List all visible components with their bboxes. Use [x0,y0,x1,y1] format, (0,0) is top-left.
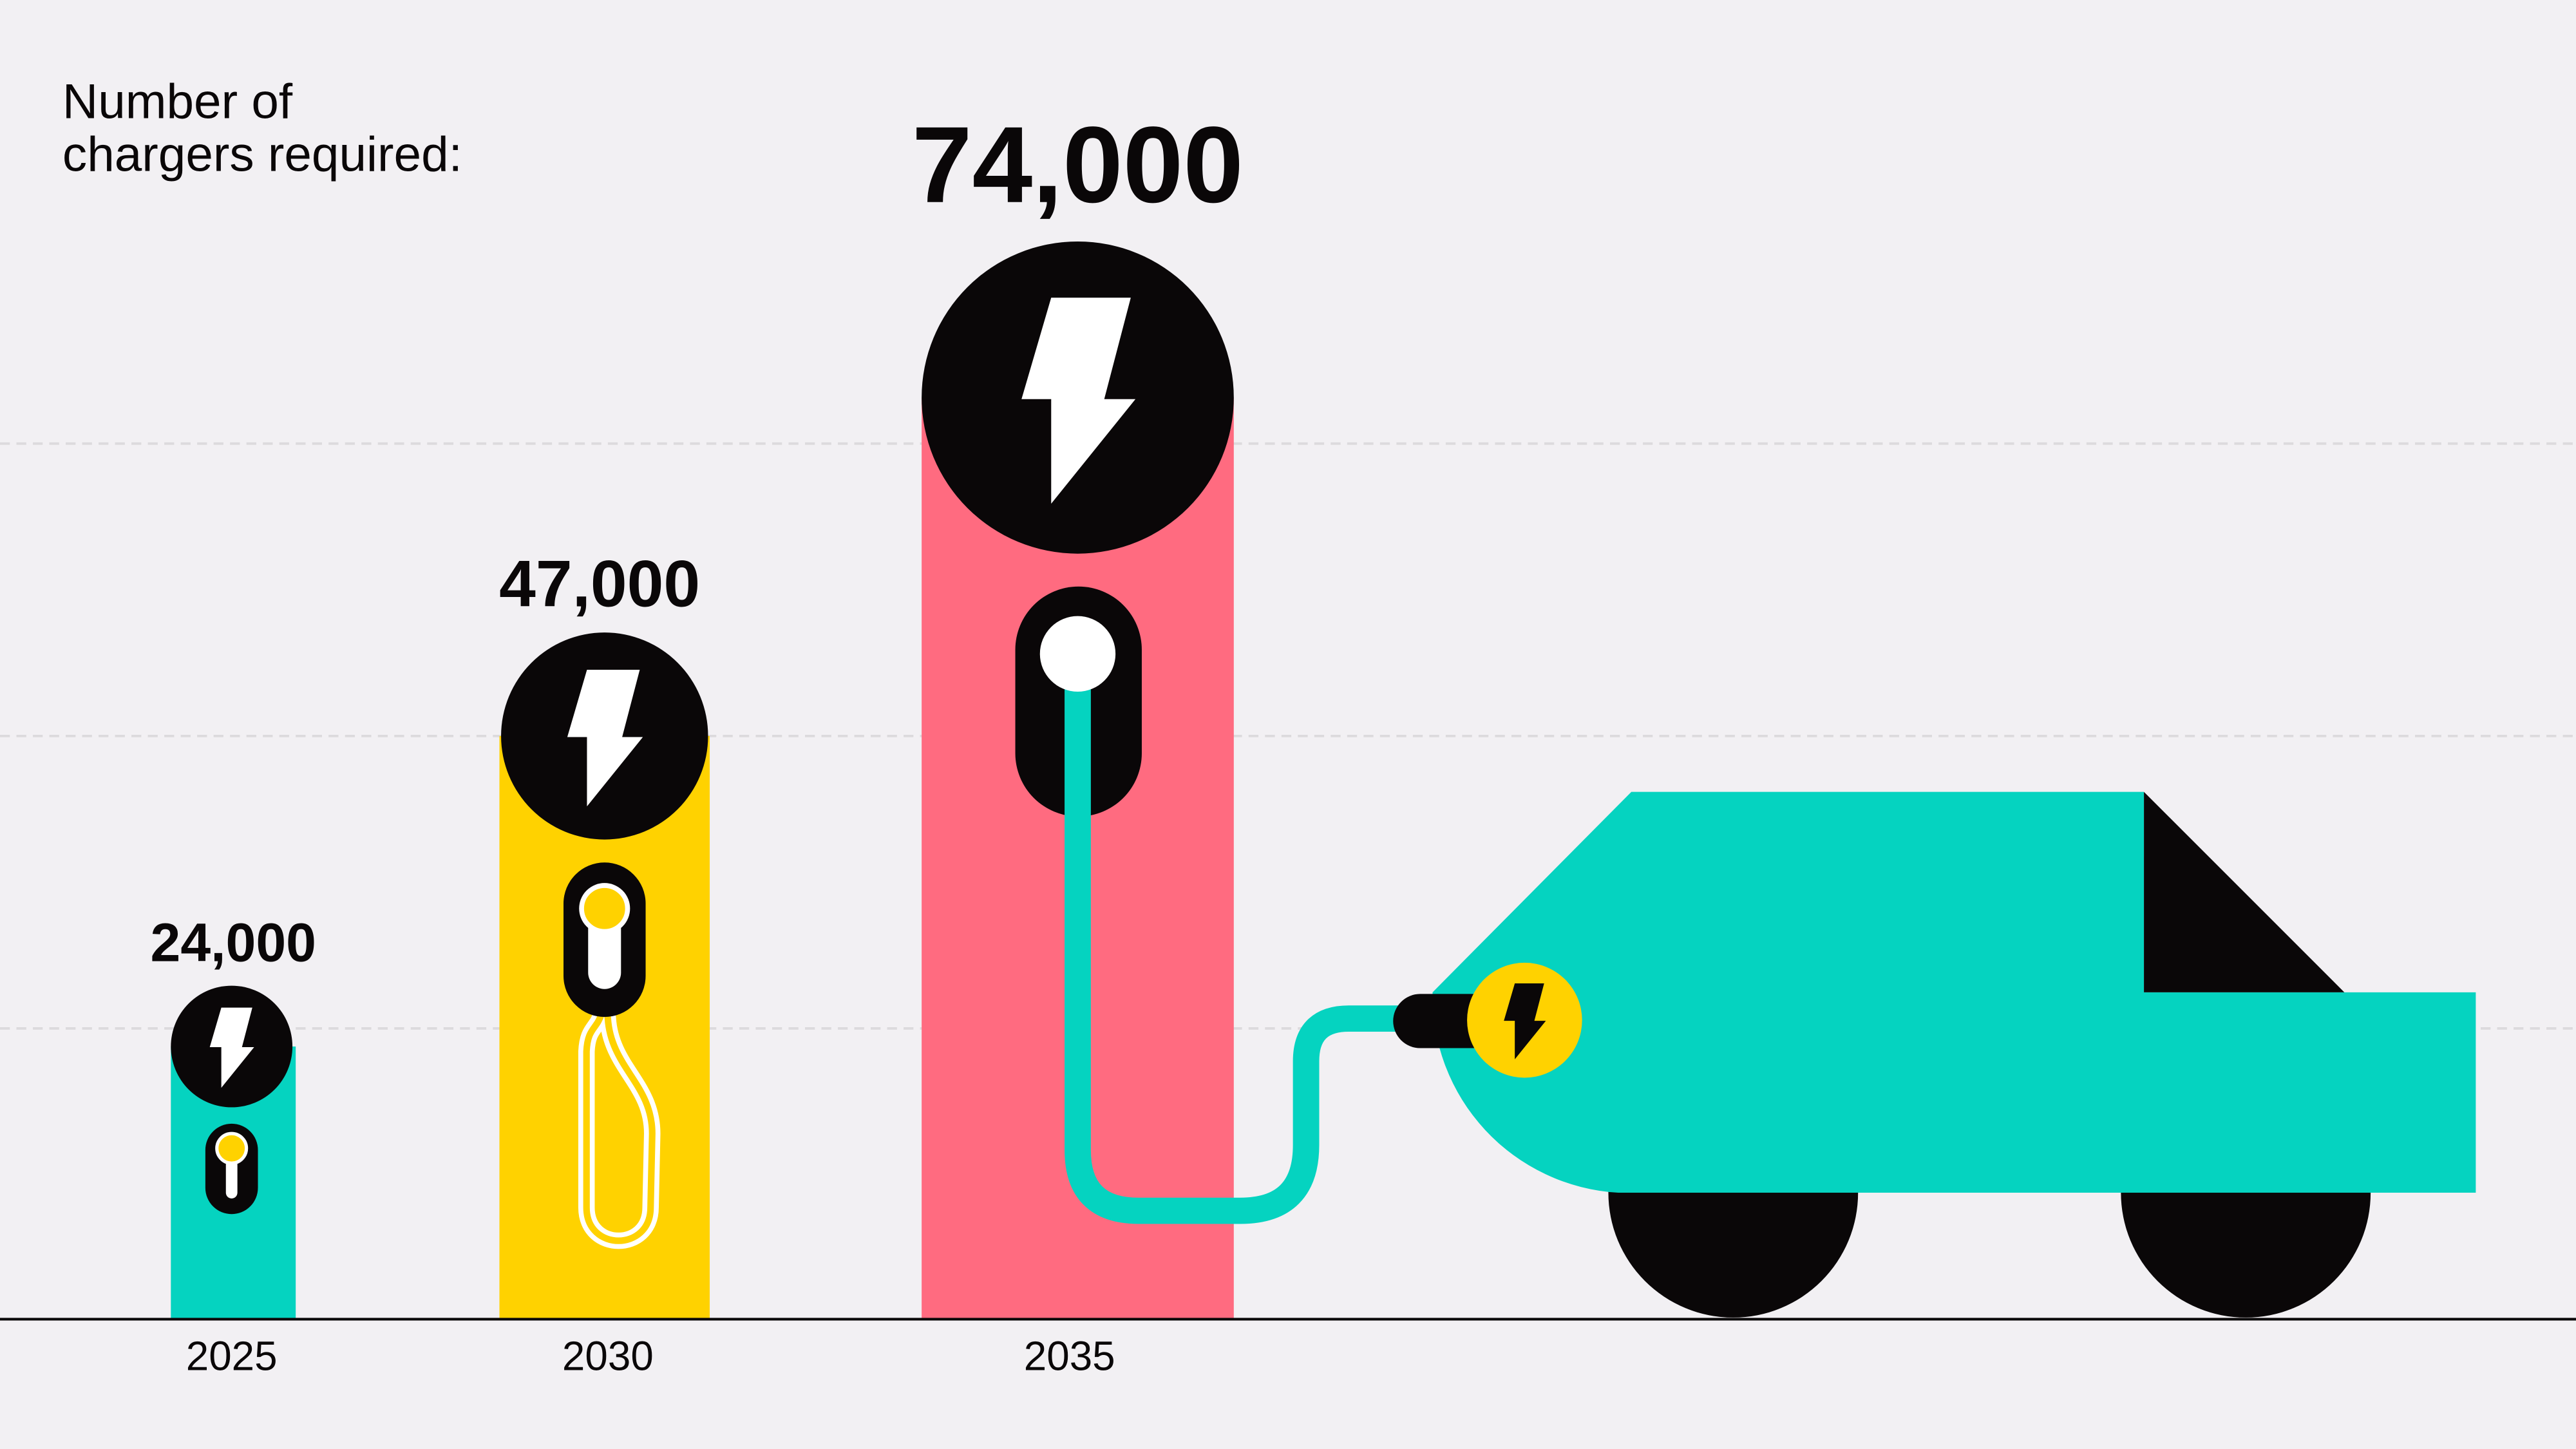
rear window [2144,792,2344,992]
charge port [1467,963,1582,1077]
holster and cable 2030 [564,862,652,1241]
label: 47,000: 47,000 [499,547,700,620]
plug [1393,994,1508,1048]
wheels [1608,1068,2371,1318]
bar: 2030 [500,632,710,1319]
icon: bolt 2030 [567,670,643,806]
label: 24,000: 24,000 [151,912,316,972]
year 2035: 2035 [1024,1333,1115,1379]
bar: 2025 [171,986,296,1319]
icon: bolt 2035 [1021,298,1135,504]
title: chargers required: [62,127,462,182]
label: 74,000: 74,000 [912,104,1244,225]
holster 2035 [1016,587,1142,817]
year 2030: 2030 [562,1333,654,1379]
cable [1077,657,1413,1211]
icon: bolt 2025 [210,1008,254,1088]
car [1393,792,2476,1193]
holster 2025 [205,1124,258,1214]
year 2025: 2025 [186,1333,278,1379]
title: Number of [62,75,292,129]
bar: 2035 [922,242,1234,1319]
